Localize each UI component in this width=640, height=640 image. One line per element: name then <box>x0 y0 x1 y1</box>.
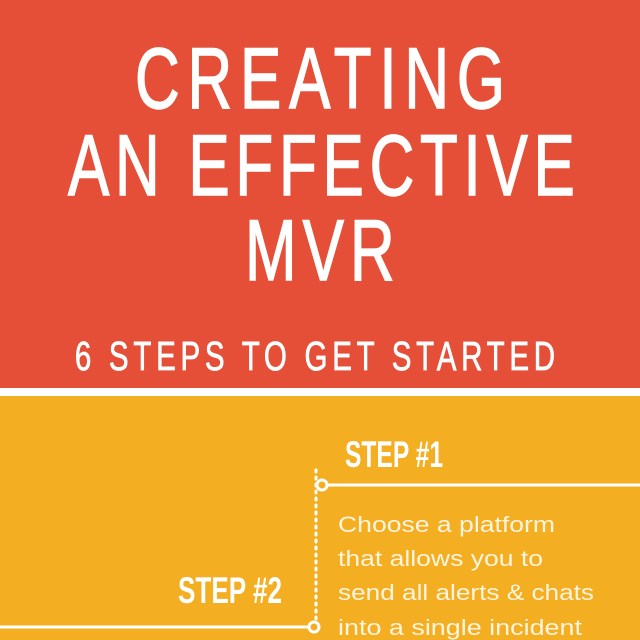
text: step 1 description <box>338 512 594 640</box>
text: step 1 description: Choose a platform <box>338 512 555 537</box>
header panel <box>0 0 640 388</box>
heading: step 2: STEP #2 <box>178 570 282 611</box>
text: step 1 description: into a single incident <box>338 615 582 640</box>
subtitle: 6 STEPS TO GET STARTED <box>75 333 555 379</box>
title: CREATING <box>135 30 505 126</box>
text: step 1 description: send all alerts & chats <box>338 580 594 605</box>
timeline connector <box>0 470 640 632</box>
title: AN EFFECTIVE <box>68 117 575 213</box>
title: MVR <box>245 202 395 298</box>
text: step 1 description: that allows you to <box>338 546 543 571</box>
steps panel <box>0 396 640 640</box>
heading: step 1: STEP #1 <box>345 434 443 475</box>
title <box>68 30 575 298</box>
